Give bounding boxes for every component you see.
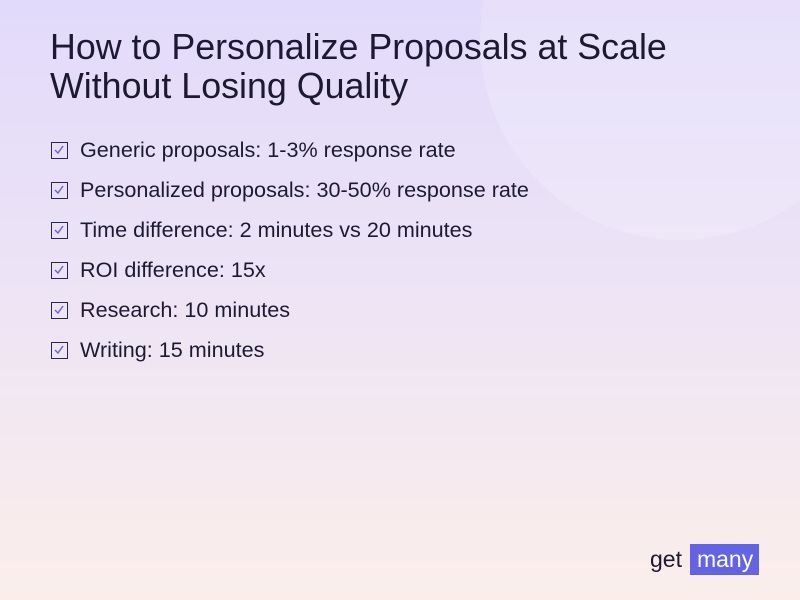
title: How to Personalize Proposals at Scale (50, 27, 667, 67)
item 2: Personalized proposals: 30-50% response rate (80, 177, 529, 202)
item 6: Writing: 15 minutes (80, 337, 264, 362)
item 3: Time difference: 2 minutes vs 20 minutes (80, 217, 472, 242)
checklist (51, 137, 529, 362)
logo: many (697, 546, 753, 572)
title (50, 27, 667, 106)
title: Without Losing Quality (50, 66, 408, 106)
item 1: Generic proposals: 1-3% response rate (80, 137, 456, 162)
decorative circle (480, 0, 800, 240)
logo (650, 544, 759, 575)
item 5: Research: 10 minutes (80, 297, 290, 322)
item 4: ROI difference: 15x (80, 257, 266, 282)
logo: get (650, 546, 682, 572)
